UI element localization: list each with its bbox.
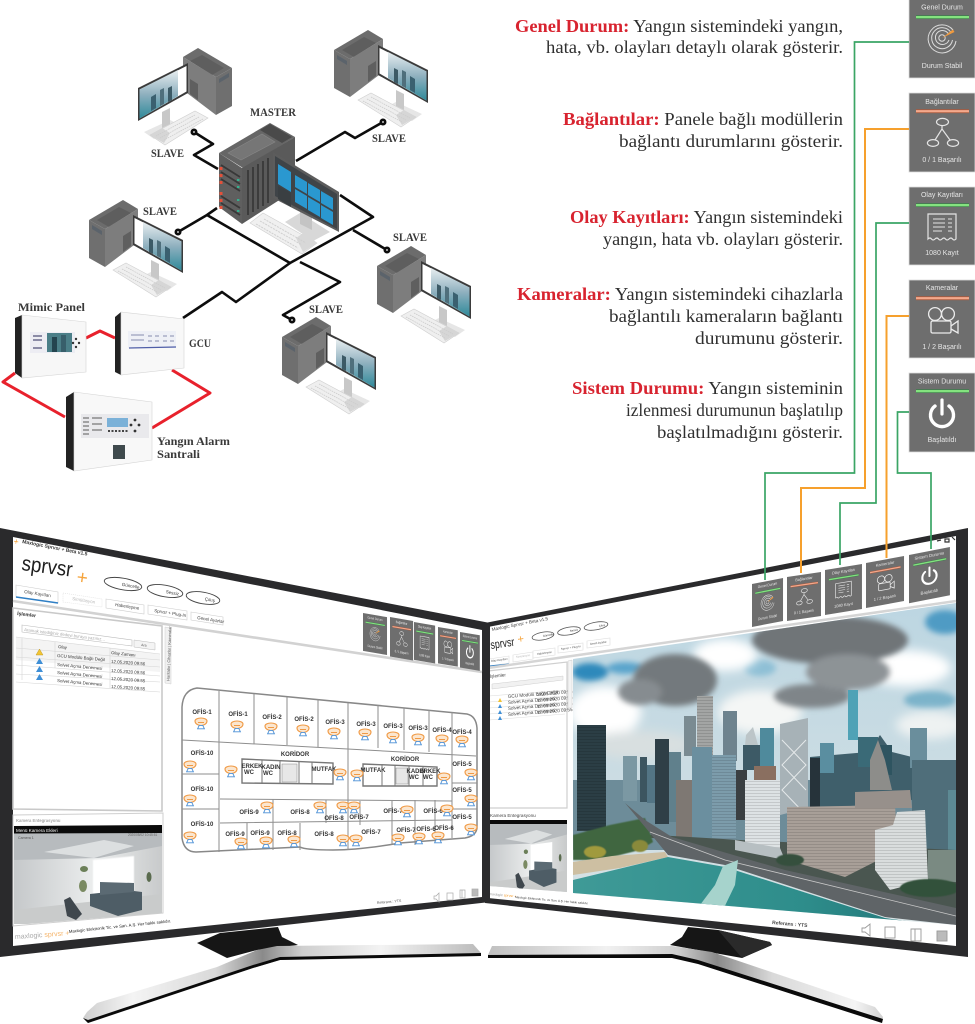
tabs: Haberleşme bbox=[537, 650, 553, 656]
tabs: Sprvsr + Plug-In bbox=[561, 644, 582, 651]
mini tile: Olay Kayıtları bbox=[825, 564, 862, 615]
wc block left bbox=[241, 759, 337, 784]
right monitor bbox=[485, 528, 968, 957]
room labels: OFİS-1 bbox=[228, 711, 248, 718]
text: Bağlantılar: bağlantı durumlarını gösterir. bbox=[619, 131, 843, 151]
room labels: OFİS-7 bbox=[396, 827, 416, 834]
mini tile: Kameralar: Kameralar bbox=[876, 559, 895, 568]
room labels: OFİS-3 bbox=[408, 725, 428, 732]
tab: Olay Kayıtları: Olay Kayıtları bbox=[24, 589, 51, 598]
camera panel: Kamera Entegrasyonu bbox=[490, 813, 536, 818]
text: Genel Durum: hata, vb. olayları detaylı olarak gösterir. bbox=[546, 37, 843, 57]
status tile: Olay Kayıtları: Olay Kayıtları bbox=[921, 192, 963, 199]
room labels: OFİS-10 bbox=[191, 750, 214, 757]
Yangın Alarm Santrali device bbox=[66, 392, 152, 471]
room labels: KORİDOR bbox=[391, 756, 420, 763]
wc block left: MUTFAK bbox=[312, 767, 337, 773]
text: Kameralar: durumunu gösterir. bbox=[695, 328, 843, 348]
tab: Sprvsr + Plug-In bbox=[148, 605, 187, 620]
header divider bbox=[13, 601, 482, 672]
status tile: Bağlantılar bbox=[909, 93, 975, 172]
events table: 12.05.2020 09:56 bbox=[111, 659, 146, 666]
city photo bbox=[569, 600, 965, 940]
footer bbox=[489, 892, 589, 905]
logo: + bbox=[75, 567, 89, 589]
room labels: OFİS-9 bbox=[239, 809, 259, 816]
room labels: OFİS-4 bbox=[432, 727, 452, 734]
text: Kameralar: bağlantılı kameraların bağlantı bbox=[609, 306, 843, 326]
mini tile: Olay Kayıtları: 1080 Kayıt bbox=[834, 601, 854, 609]
mini tile: Sistem Durumu bbox=[460, 632, 480, 671]
tabs bbox=[16, 585, 225, 625]
room labels: OFİS-8 bbox=[277, 830, 297, 837]
wc block right: ERKEK bbox=[419, 769, 441, 775]
tab: Genel Ayarlar bbox=[191, 612, 225, 625]
events table: Olay bbox=[58, 644, 68, 650]
tabs: Simülasyon bbox=[516, 653, 531, 659]
footer logo: maxlogic sprvsr + bbox=[15, 930, 70, 941]
tabs: Olay Kayıtları bbox=[491, 657, 508, 663]
label: slave 3: SLAVE bbox=[143, 204, 177, 218]
vertical side tabs: Haritalar | Cihazlar | Kameralar bbox=[166, 625, 172, 681]
right stand bbox=[488, 927, 883, 1023]
toolbar buttons: Çıkış bbox=[598, 623, 606, 628]
events panel bbox=[488, 662, 573, 808]
text: Kameralar: Kameralar: Yangın sistemindeki cihazlarla bbox=[517, 284, 843, 304]
room labels: OFİS-5 bbox=[452, 761, 472, 768]
status tile: Kameralar: 1 / 2 Başarılı bbox=[922, 344, 962, 351]
mini tile: Bağlantılar: 0 / 1 Başarılı bbox=[395, 649, 409, 656]
search box: Ara bbox=[141, 643, 147, 648]
tabs bbox=[489, 638, 610, 666]
status tile: Genel Durum: Genel Durum bbox=[921, 4, 963, 12]
text: Genel Durum: Genel Durum: Yangın sistemindeki yangın, bbox=[515, 16, 843, 36]
status tile: Sistem Durumu: Başlatıldı bbox=[928, 437, 956, 444]
text: Sistem Durumu: izlenmesi durumunun başlatılıp bbox=[626, 400, 843, 420]
reference label: Referans : YTS bbox=[772, 920, 808, 929]
room labels: OFİS-7 bbox=[349, 814, 369, 821]
text: Sistem Durumu: Sistem Durumu: Yangın sisteminin bbox=[572, 378, 843, 398]
left monitor bbox=[0, 528, 490, 957]
monitor screen bbox=[488, 536, 956, 946]
tab: Haberleşme bbox=[106, 599, 144, 614]
mini tile: Sistem Durumu: Sistem Durumu bbox=[915, 550, 945, 561]
toolbar buttons: Sessiz bbox=[569, 628, 579, 633]
mini tile: Olay Kayıtları bbox=[414, 622, 435, 664]
label: mimic panel: Mimic Panel bbox=[18, 300, 86, 314]
slave computer right bbox=[377, 246, 471, 343]
events table: Solvet Açma Denemesi bbox=[57, 678, 103, 687]
text: Bağlantılar bbox=[563, 109, 843, 151]
mini tile: Kameralar bbox=[866, 556, 904, 608]
GCU device bbox=[115, 312, 184, 375]
app title: + bbox=[13, 536, 20, 547]
room labels: OFİS-9 bbox=[225, 831, 245, 838]
events table bbox=[16, 637, 160, 692]
black network wiring bbox=[176, 120, 389, 322]
ground behind road bbox=[573, 830, 956, 912]
label: slave 5: SLAVE bbox=[309, 302, 343, 316]
wc block right bbox=[360, 764, 441, 786]
mini tile: Bağlantılar: Bağlantılar bbox=[396, 620, 407, 626]
blue sky patches bbox=[572, 610, 965, 709]
mini tile: Kameralar: Kameralar bbox=[443, 629, 453, 635]
tab: Simülasyon bbox=[63, 593, 102, 607]
mini tile: Kameralar bbox=[438, 627, 458, 667]
wc block left: WC bbox=[263, 771, 274, 777]
slave computer bottom bbox=[282, 317, 376, 414]
room labels: OFİS-6 bbox=[434, 825, 454, 832]
window controls bbox=[937, 537, 955, 542]
mini tile: Genel Durum: Genel Durum bbox=[758, 581, 777, 589]
footer: Maxlogic Elektronik Tic. ve San. A.Ş. Her hakkı saklıdır. bbox=[515, 895, 589, 905]
vertical side tabs bbox=[568, 660, 572, 708]
room labels: OFİS-3 bbox=[325, 719, 345, 726]
room labels: OFİS-5 bbox=[452, 787, 472, 794]
button: Sessiz: Sessiz bbox=[165, 589, 180, 597]
mini tile: Genel Durum bbox=[752, 578, 783, 627]
mini tile: Sistem Durumu: Başlatıldı bbox=[921, 587, 938, 596]
toolbar buttons: Güncelle bbox=[542, 632, 554, 638]
wc block right: MUTFAK bbox=[360, 768, 386, 774]
bottom icons bbox=[434, 889, 478, 902]
mini tile: Genel Durum: Genel Durum bbox=[367, 615, 383, 622]
wc block left: ERKEK bbox=[241, 764, 263, 770]
mini tile: Olay Kayıtları: Olay Kayıtları bbox=[832, 567, 855, 576]
tab: Genel Ayarlar: Genel Ayarlar bbox=[197, 615, 225, 624]
footer: maxlogic sprvsr + bbox=[489, 892, 517, 898]
events table: 12.05.2020 09:55 bbox=[111, 676, 146, 683]
wc block right: WC bbox=[409, 775, 420, 781]
diagram labels bbox=[18, 105, 427, 461]
room labels: OFİS-8 bbox=[314, 831, 334, 838]
events panel: 12.05.2020 09:56 bbox=[537, 689, 573, 697]
mini tile: Olay Kayıtları: Olay Kayıtları bbox=[418, 624, 431, 631]
tabs: Genel Ayarlar bbox=[590, 640, 607, 646]
label: slave 2: SLAVE bbox=[372, 131, 406, 145]
mini tile: Genel Durum: Durum Stabil bbox=[368, 644, 383, 651]
events panel: İşlemler bbox=[17, 610, 36, 619]
room labels: OFİS-10 bbox=[191, 786, 214, 793]
header divider bbox=[488, 601, 956, 668]
wc block left: KADIN bbox=[262, 765, 280, 771]
events table: Solvet Açma Denemesi bbox=[57, 662, 103, 671]
camera panel: 2020/05/02 10:45:51 bbox=[128, 833, 157, 837]
trees bbox=[573, 818, 960, 897]
monitor screen bbox=[13, 537, 482, 946]
master server and monitor bbox=[219, 123, 339, 254]
room labels: OFİS-3 bbox=[356, 721, 376, 728]
events panel: 12.05.2020 09:55 bbox=[537, 707, 573, 715]
beach bbox=[573, 852, 668, 875]
mini tile: Sistem Durumu: Sistem Durumu bbox=[463, 633, 477, 641]
monitor frame bbox=[0, 528, 490, 957]
events panel: 12.05.2020 09:55 bbox=[537, 701, 573, 709]
red loop wiring bbox=[3, 331, 210, 428]
room labels: KORİDOR bbox=[281, 751, 310, 758]
mini tile: Genel Durum bbox=[363, 613, 387, 655]
camera panel: Kamera Entegrasyonu bbox=[16, 818, 61, 823]
water bbox=[573, 857, 906, 921]
events table: 12.05.2020 09:55 bbox=[111, 684, 146, 691]
status tile: Sistem Durumu bbox=[909, 373, 975, 452]
events panel: Solvet Açma Denemesi bbox=[508, 702, 555, 711]
wc block left: WC bbox=[244, 770, 255, 776]
events panel: Solvet Açma Denemesi bbox=[508, 708, 555, 717]
text: Genel Durum bbox=[515, 16, 843, 57]
room labels: OFİS-1 bbox=[192, 709, 212, 716]
room labels: OFİS-4 bbox=[452, 729, 472, 736]
mini tile: Bağlantılar: Bağlantılar bbox=[795, 576, 813, 582]
mimic panel device bbox=[15, 315, 86, 378]
camera panel bbox=[13, 813, 163, 926]
room labels: OFİS-7 bbox=[383, 808, 403, 815]
text: Kameralar bbox=[517, 284, 843, 348]
status tile: Olay Kayıtları bbox=[909, 187, 975, 265]
room labels: OFİS-8 bbox=[324, 815, 344, 822]
logo: + bbox=[517, 633, 525, 646]
tab: Simülasyon: Simülasyon bbox=[72, 596, 96, 605]
room labels: OFİS-9 bbox=[250, 830, 270, 837]
events panel: GCU Modülü Bağlı Değil bbox=[508, 690, 558, 699]
events panel: İşlemler bbox=[489, 671, 507, 679]
room labels bbox=[191, 709, 472, 838]
monitor frame bbox=[485, 528, 968, 957]
status tile: Olay Kayıtları: 1080 Kayıt bbox=[925, 250, 959, 257]
foreground towers bbox=[577, 725, 606, 831]
tab: Olay Kayıtları bbox=[16, 585, 58, 603]
mini tile: Genel Durum: Durum Stabil bbox=[758, 613, 777, 621]
events table: Solvet Açma Denemesi bbox=[57, 670, 103, 679]
text: Olay Kayıtları bbox=[570, 207, 843, 249]
background skyline bbox=[573, 780, 912, 850]
camera panel: Menü Kamera Ekleri bbox=[16, 828, 58, 833]
text: Olay Kayıtları: Olay Kayıtları: Yangın sistemindeki bbox=[570, 207, 843, 227]
camera panel bbox=[489, 813, 567, 893]
events table: Olay Zamanı bbox=[111, 650, 136, 658]
text: Sistem Durumu: başlatılmadığını gösterir. bbox=[657, 422, 843, 442]
room labels: OFİS-7 bbox=[361, 829, 381, 836]
status tile: Sistem Durumu: Sistem Durumu bbox=[918, 378, 966, 386]
room labels: OFİS-3 bbox=[383, 723, 403, 730]
status tile: Genel Durum bbox=[909, 0, 975, 78]
room labels: OFİS-10 bbox=[191, 821, 214, 828]
label: GCU: GCU bbox=[189, 336, 211, 350]
room labels: OFİS-2 bbox=[294, 716, 314, 723]
room labels: OFİS-6 bbox=[423, 808, 443, 815]
events table: GCU Modülü Bağlı Değil bbox=[57, 653, 105, 662]
mini tile: Bağlantılar bbox=[787, 572, 821, 621]
label: alarm panel: Yangın Alarm bbox=[157, 434, 230, 448]
label: slave 1: SLAVE bbox=[151, 146, 184, 160]
app title: Maxlogic Sprvsr + Beta v1.5 bbox=[491, 616, 549, 632]
road bbox=[625, 803, 956, 925]
grey clouds bbox=[618, 616, 908, 708]
events panel: 12.05.2020 09:56 bbox=[537, 695, 573, 703]
camera panel: Camera 1 bbox=[18, 836, 34, 840]
events panel: Solvet Açma Denemesi bbox=[508, 696, 555, 705]
label: alarm panel: Santrali bbox=[157, 447, 201, 461]
app title: Maxlogic Sprvsr + Beta v1.5 bbox=[22, 539, 88, 558]
text: Olay Kayıtları: yangın, hata vb. olayları gösterir. bbox=[603, 229, 843, 249]
status tile: Genel Durum: Durum Stabil bbox=[922, 63, 963, 70]
tab: Haberleşme: Haberleşme bbox=[115, 602, 140, 611]
button: Çıkış: Çıkış bbox=[204, 596, 216, 603]
slave computer left bbox=[89, 200, 183, 297]
status tile: Kameralar: Kameralar bbox=[926, 285, 959, 292]
mini tile: Sistem Durumu: Başlatıldı bbox=[466, 660, 474, 667]
text: Bağlantılar: Bağlantılar: Panele bağlı modüllerin bbox=[563, 109, 843, 129]
logo: sprvsr bbox=[20, 552, 74, 582]
wc block right: WC bbox=[423, 775, 434, 781]
floor plan bbox=[182, 688, 477, 852]
mini tile: Bağlantılar: 0 / 1 Başarılı bbox=[794, 608, 814, 615]
mini tile: Bağlantılar bbox=[390, 617, 413, 660]
room labels: OFİS-6 bbox=[416, 826, 436, 833]
fire sensors bbox=[184, 718, 477, 849]
text: Sistem Durumu bbox=[572, 378, 843, 442]
events panel bbox=[13, 608, 162, 811]
search box: Aramak istediğiniz dedeyi buraya yazınız... bbox=[24, 627, 105, 642]
status tile: Bağlantılar: 0 / 1 Başarılı bbox=[922, 157, 962, 164]
toolbar buttons bbox=[103, 575, 221, 607]
events table: 12.05.2020 09:56 bbox=[111, 668, 146, 675]
label: slave 4: SLAVE bbox=[393, 230, 427, 244]
footer copyright: Maxlogic Elektronik Tic. ve San. A.Ş. Her hakkı saklıdır. bbox=[69, 918, 171, 934]
descriptions text column bbox=[515, 16, 843, 442]
wc block right: KADIN bbox=[406, 769, 426, 775]
left stand bbox=[83, 927, 481, 1023]
tab: Sprvsr + Plug-In: Sprvsr + Plug-In bbox=[154, 608, 187, 618]
status tile: Kameralar bbox=[909, 280, 975, 358]
mini tile: Kameralar: 1 / 2 Başarılı bbox=[874, 593, 896, 602]
slave computer top-right bbox=[334, 30, 428, 127]
status tile: Bağlantılar: Bağlantılar bbox=[925, 99, 959, 106]
white clouds bbox=[569, 639, 964, 759]
mini tile: Sistem Durumu bbox=[909, 547, 950, 603]
slave computer top-left bbox=[138, 48, 232, 145]
logo: sprvsr bbox=[489, 635, 515, 652]
room labels: OFİS-5 bbox=[452, 814, 472, 821]
search box bbox=[22, 625, 155, 650]
connector lines from tiles to monitor bbox=[765, 42, 931, 580]
label: master: MASTER bbox=[250, 105, 296, 119]
room labels: OFİS-2 bbox=[262, 714, 282, 721]
mini tile: Olay Kayıtları: 1080 Kayıt bbox=[419, 653, 430, 659]
mini tile: Kameralar: 1 / 2 Başarılı bbox=[442, 656, 454, 663]
toolbar buttons bbox=[532, 620, 608, 642]
reference label: Referans : YTS bbox=[377, 899, 402, 905]
label: alarm panel bbox=[157, 434, 230, 461]
room labels: OFİS-8 bbox=[290, 809, 310, 816]
button: Güncelle: Güncelle bbox=[121, 582, 140, 590]
bottom icons bbox=[862, 924, 947, 941]
